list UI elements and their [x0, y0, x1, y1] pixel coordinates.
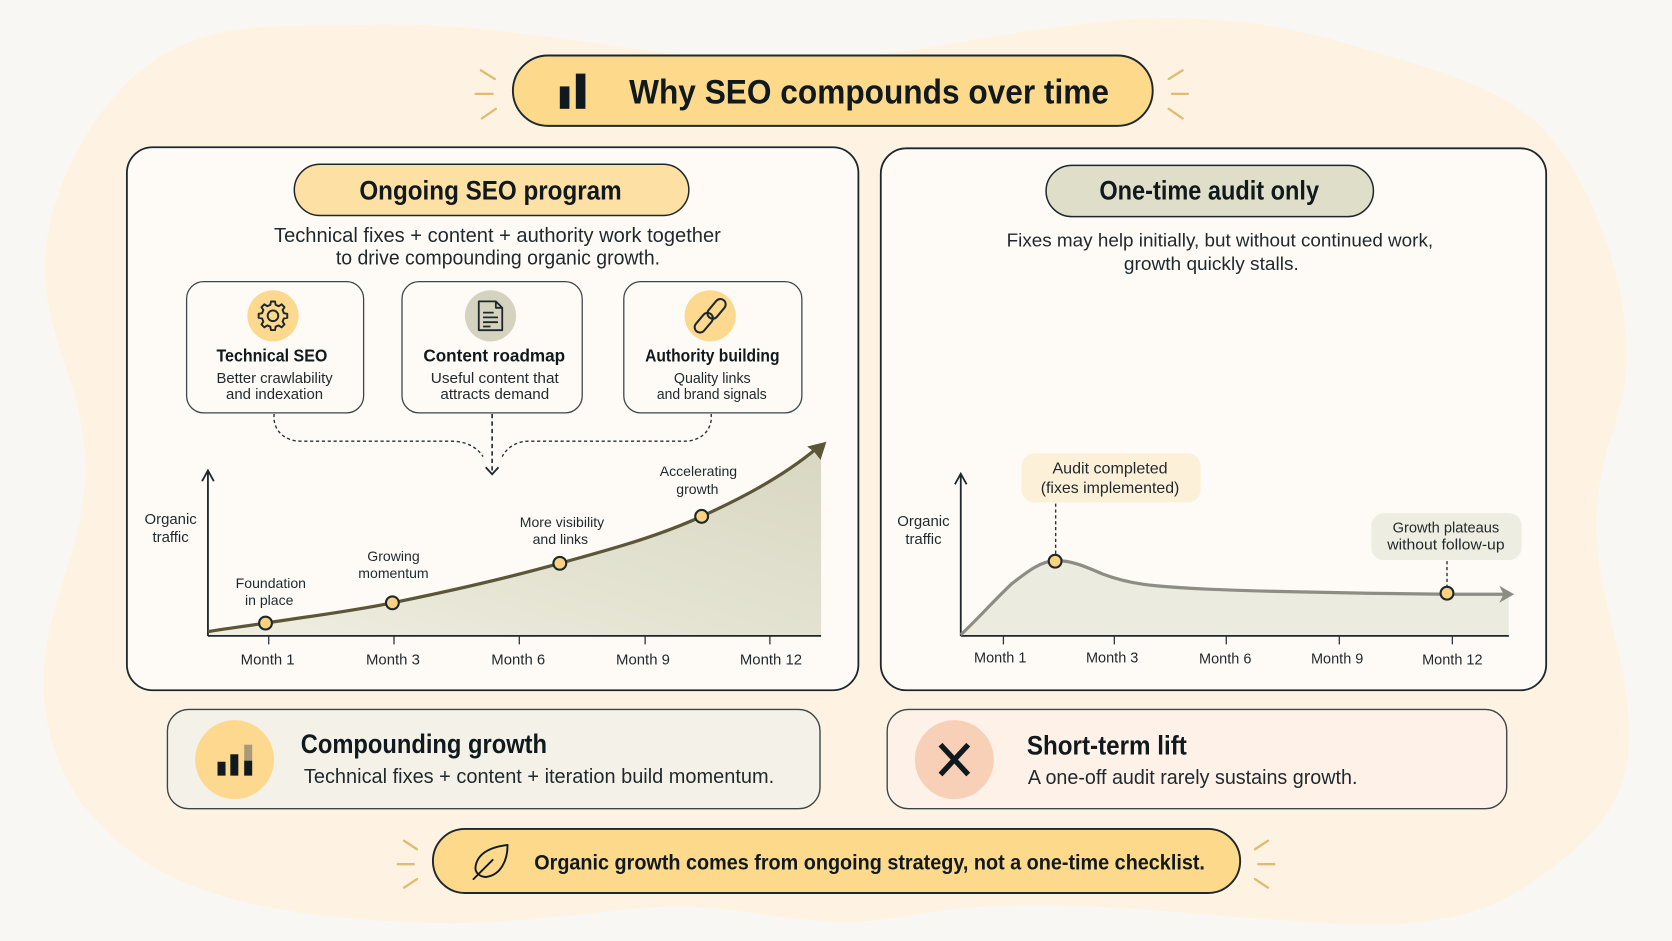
card text: authority building: Quality links	[674, 371, 751, 387]
axis title: traffic	[153, 529, 189, 546]
month labels: Month 9	[1311, 652, 1363, 668]
callout: audit completed	[1022, 453, 1201, 555]
card text: content roadmap	[431, 371, 559, 403]
data points	[1049, 555, 1453, 600]
chart: compounding traffic	[144, 442, 826, 669]
summary: short-term lift	[887, 709, 1507, 809]
heading pill: audit: One-time audit only	[1099, 176, 1319, 206]
panel: ongoing SEO program	[127, 147, 858, 690]
month labels: Month 6	[491, 652, 545, 669]
icon: bar chart	[560, 74, 585, 109]
area under curve	[961, 561, 1509, 636]
arrow: pillars converge	[274, 414, 711, 474]
description: ongoing: to drive compounding organic growth.	[336, 248, 660, 270]
callout: growth plateaus: without follow-up	[1386, 537, 1505, 553]
month labels: Month 1	[974, 651, 1026, 667]
axis title: Organic	[897, 513, 950, 530]
description: audit: growth quickly stalls.	[1124, 253, 1299, 274]
icon: leaf	[473, 845, 508, 879]
milestone labels: growth	[676, 481, 718, 497]
milestone labels: Accelerating	[660, 463, 737, 479]
description: ongoing	[274, 225, 721, 270]
icon: gear	[247, 290, 299, 341]
description: audit: Fixes may help initially, but without continued work,	[1007, 229, 1433, 250]
card: content roadmap	[402, 282, 582, 413]
milestone labels: in place	[245, 592, 294, 608]
milestone labels: momentum	[358, 565, 429, 581]
conclusion banner	[433, 829, 1240, 893]
callout: audit completed: Audit completed	[1052, 461, 1168, 478]
month labels: Month 3	[366, 652, 420, 669]
card: technical SEO	[187, 282, 364, 413]
card title: authority building: Authority building	[645, 346, 779, 366]
title banner	[513, 55, 1153, 126]
milestone labels: More visibility	[520, 514, 604, 530]
icon: document	[465, 290, 516, 341]
axes	[202, 470, 821, 636]
callout: growth plateaus	[1371, 513, 1522, 587]
month labels	[974, 651, 1483, 669]
callout: growth plateaus: Growth plateaus	[1393, 520, 1499, 536]
title text: Why SEO compounds over time	[629, 73, 1109, 111]
month labels: Month 3	[1086, 651, 1138, 667]
card title: technical SEO: Technical SEO	[216, 346, 327, 366]
month labels: Month 1	[241, 652, 295, 669]
summary text: A one-off audit rarely sustains growth.	[1028, 767, 1357, 789]
month labels: Month 12	[740, 652, 802, 669]
axis title	[897, 513, 950, 548]
month labels: Month 9	[616, 652, 670, 669]
axis title: Organic	[144, 511, 197, 528]
heading pill: ongoing	[294, 164, 689, 216]
axis title	[144, 511, 197, 546]
card text: technical SEO: Better crawlability	[216, 371, 334, 387]
milestone labels: Growing	[367, 548, 420, 564]
month labels: Month 12	[1422, 653, 1483, 669]
card text: content roadmap: Useful content that	[431, 371, 559, 387]
conclusion rays	[398, 841, 1274, 888]
summary title: Short-term lift	[1027, 730, 1187, 760]
description: audit	[1007, 229, 1433, 274]
card title: content roadmap: Content roadmap	[423, 346, 565, 366]
growth curve with arrow	[208, 442, 826, 632]
summary text: Technical fixes + content + iteration build momentum.	[304, 766, 774, 788]
card: authority building	[624, 282, 802, 413]
heading pill: audit	[1046, 165, 1373, 217]
card text: authority building: and brand signals	[657, 387, 767, 403]
card text: authority building	[657, 371, 767, 403]
icon: cross	[915, 720, 994, 799]
card text: technical SEO	[216, 371, 334, 403]
conclusion text: Organic growth comes from ongoing strategy, not a one-time checklist.	[534, 851, 1205, 875]
axes	[955, 474, 1509, 636]
icon: rising bars	[195, 720, 274, 799]
description: ongoing: Technical fixes + content + authority work together	[274, 225, 721, 247]
milestone labels: and links	[533, 531, 588, 547]
summary title: Compounding growth	[301, 729, 547, 759]
title rays	[476, 70, 1188, 118]
data points	[259, 510, 708, 629]
card text: content roadmap: attracts demand	[440, 387, 549, 403]
card text: technical SEO: and indexation	[226, 387, 323, 403]
plateau curve with arrow	[961, 561, 1514, 635]
month labels: Month 6	[1199, 652, 1251, 668]
chart: plateau traffic	[897, 453, 1522, 669]
area under curve	[208, 444, 821, 636]
icon: link	[685, 290, 736, 341]
month labels	[241, 652, 802, 669]
milestone labels	[236, 463, 737, 608]
milestone labels: Foundation	[236, 575, 306, 591]
summary: compounding growth	[167, 709, 820, 809]
panel: one-time audit only	[881, 148, 1546, 690]
axis title: traffic	[905, 531, 942, 548]
heading pill: ongoing: Ongoing SEO program	[359, 176, 622, 206]
callout: audit completed: (fixes implemented)	[1041, 480, 1179, 497]
